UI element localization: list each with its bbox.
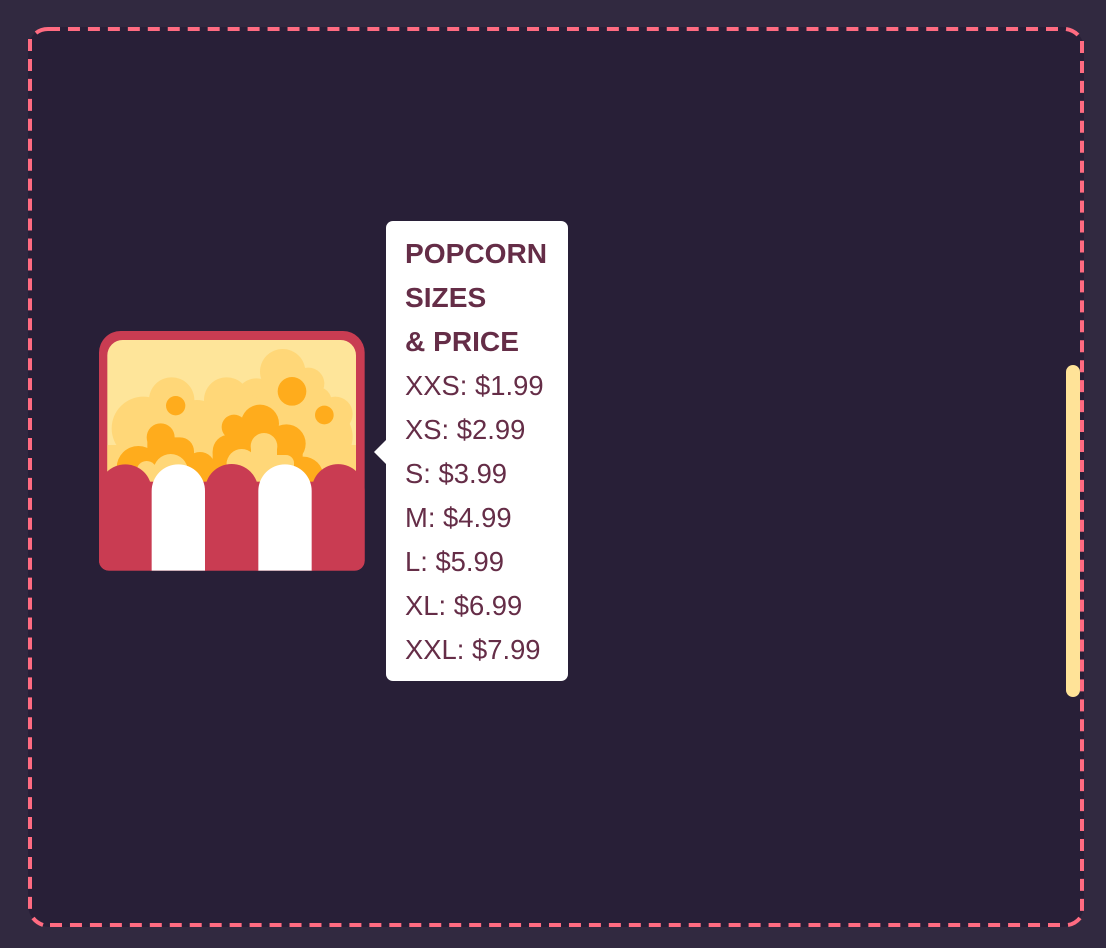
tooltip: popcorn sizes and price (386, 221, 568, 681)
tooltip text: L: $5.99 (405, 546, 504, 577)
tooltip text: & PRICE (405, 326, 519, 357)
tooltip text: XXL: $7.99 (405, 634, 541, 665)
tooltip text: XL: $6.99 (405, 590, 522, 621)
popcorn middle layer (117, 405, 323, 497)
popcorn back layer (107, 349, 356, 487)
tooltip text: M: $4.99 (405, 502, 512, 533)
popcorn front layer (137, 433, 294, 489)
tooltip text: XXS: $1.99 (405, 370, 544, 401)
tooltip text: SIZES (405, 282, 486, 313)
scroll bar (1066, 365, 1080, 697)
box inner yellow (107, 340, 356, 487)
tooltip text (405, 238, 547, 665)
tooltip arrow (374, 440, 386, 464)
popcorn kernels (166, 377, 334, 424)
tooltip text: POPCORN (405, 238, 547, 269)
box red back (99, 331, 365, 571)
icon: popcorn box (99, 331, 365, 571)
tooltip text: XS: $2.99 (405, 414, 525, 445)
tooltip text: S: $3.99 (405, 458, 507, 489)
box stripes (99, 464, 365, 571)
